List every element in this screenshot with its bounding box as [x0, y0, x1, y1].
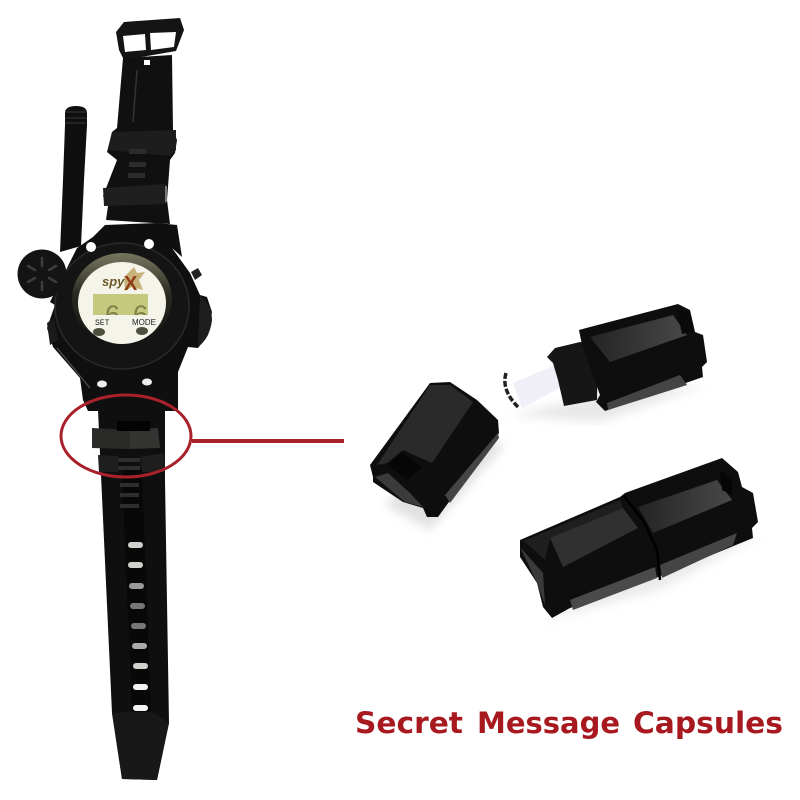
- LCD display: 6: [133, 300, 148, 330]
- SET label and button: SET: [95, 319, 110, 328]
- caption: Secret: [355, 706, 463, 740]
- caption: Capsules: [633, 706, 783, 740]
- watch illustration: [18, 18, 212, 780]
- LCD display: 6: [105, 300, 120, 330]
- logo: spy X: X: [124, 273, 138, 295]
- icon: speaker knob: [18, 250, 66, 298]
- white message scroll: [513, 365, 560, 408]
- LCD display: [93, 294, 148, 315]
- icon: lower strap: [92, 410, 169, 780]
- logo: spy X: spy: [102, 274, 125, 289]
- callout: red ellipse and connector: [61, 395, 344, 477]
- capsule: open body with white scroll: [505, 304, 707, 422]
- strap holes: [128, 542, 148, 711]
- capsule: open cap: [370, 382, 505, 530]
- icon: watch case: [47, 223, 212, 411]
- capsule: closed assembled: [520, 458, 760, 620]
- caption: [355, 706, 783, 740]
- icon: upper strap with buckle: [103, 18, 184, 224]
- icon: watch face: [78, 262, 166, 344]
- caption: Message: [477, 706, 620, 740]
- MODE label and button: MODE: [132, 318, 156, 327]
- icon: antenna: [60, 106, 87, 252]
- logo: spy X: [102, 267, 145, 295]
